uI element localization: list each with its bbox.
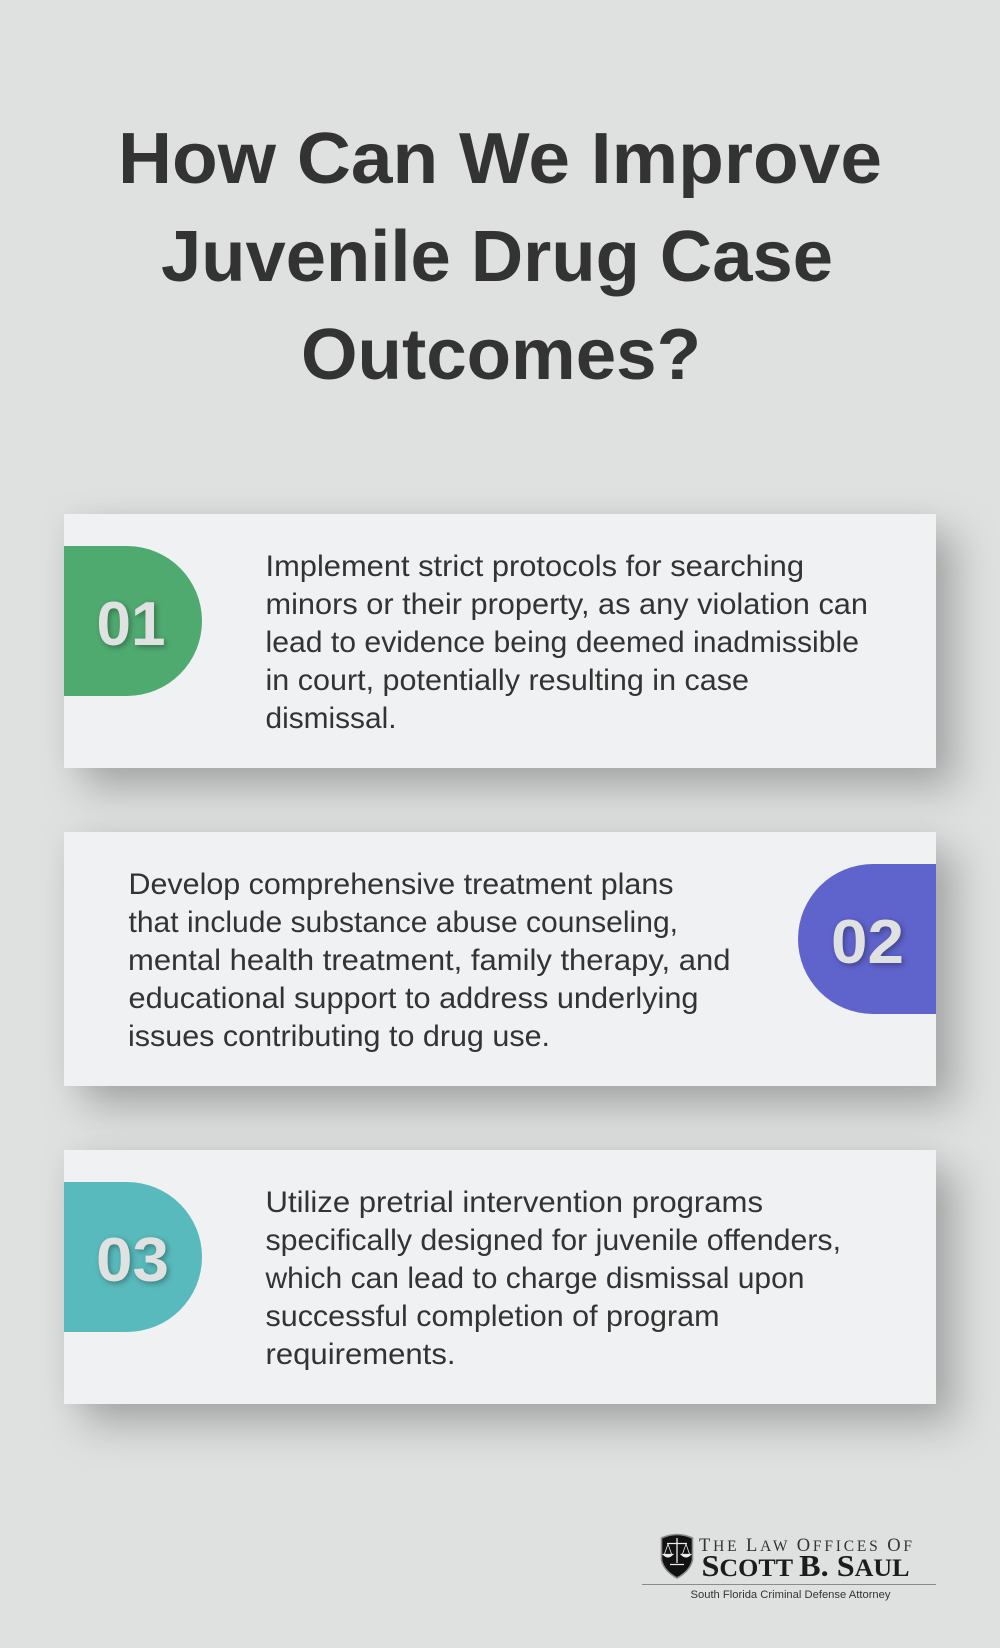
text block 01: Implement strict protocols for searching — [266, 550, 804, 583]
logo: law offices — [642, 1534, 936, 1601]
logo divider — [642, 1584, 936, 1585]
text block 03: requirements. — [266, 1338, 456, 1371]
text block 01 — [266, 550, 868, 735]
number badge 02: 02 — [831, 908, 904, 977]
number badge 02 — [798, 864, 936, 1014]
title — [118, 119, 882, 395]
text block 01: in court, potentially resulting in case — [266, 664, 749, 697]
card background 02 — [64, 832, 936, 1086]
icon: scales of justice shield — [662, 1534, 692, 1578]
panel: step 02 — [64, 832, 936, 1086]
number badge 01: 01 — [96, 590, 166, 659]
text block 02: that include substance abuse counseling, — [128, 906, 678, 939]
number badge 03 — [64, 1182, 202, 1332]
text block 01: lead to evidence being deemed inadmissible — [266, 626, 859, 659]
text block 01: dismissal. — [266, 702, 396, 735]
text block 02: educational support to address underlying — [128, 982, 698, 1015]
title: How Can We Improve — [118, 119, 882, 199]
panel: step 01 — [64, 514, 936, 768]
text block 02 — [128, 868, 730, 1053]
text block 03: successful completion of program — [266, 1300, 720, 1333]
card background 01 — [64, 514, 936, 768]
title: Outcomes? — [301, 315, 701, 395]
text block 03: which can lead to charge dismissal upon — [264, 1262, 804, 1295]
panel: step 03 — [64, 1150, 936, 1404]
number badge 01 — [64, 546, 202, 696]
card background 03 — [64, 1150, 936, 1404]
text block 03 — [264, 1186, 841, 1371]
number badge 03: 03 — [96, 1226, 169, 1295]
logo firm name: SCOTT B. SAUL — [702, 1548, 910, 1583]
text block 02: mental health treatment, family therapy, and — [128, 944, 730, 977]
logo firm line: THE LAW OFFICES OF — [699, 1536, 912, 1556]
text block 02: issues contributing to drug use. — [128, 1020, 550, 1053]
logo tagline: South Florida Criminal Defense Attorney — [690, 1589, 891, 1601]
title: Juvenile Drug Case — [161, 217, 833, 297]
text block 02: Develop comprehensive treatment plans — [128, 868, 674, 901]
text block 03: Utilize pretrial intervention programs — [266, 1186, 763, 1219]
text block 01: minors or their property, as any violation can — [266, 588, 868, 621]
text block 03: specifically designed for juvenile offenders, — [266, 1224, 841, 1257]
